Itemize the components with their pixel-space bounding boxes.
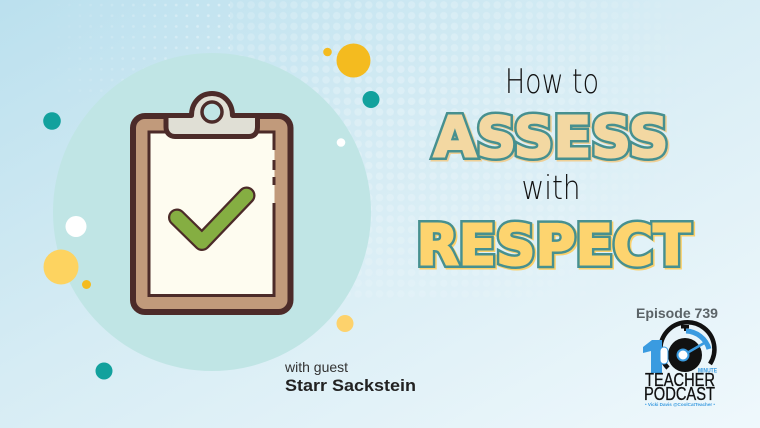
episode number: Episode 739 [636,305,718,321]
large teal circle [53,53,371,371]
numeral one and microphone [643,340,668,373]
clip ring hole [202,102,222,122]
headline: RESPECT: RESPECT [416,214,690,278]
paper sheet [149,132,274,296]
script line: with: with [522,168,580,207]
icon: clipboard with check mark [133,94,290,312]
script line: How to: How to [505,62,599,102]
clipboard board [133,116,290,312]
clip [166,94,258,136]
byline: • Vicki Davis @CoolCatTeacher • [645,402,715,407]
check mark [177,196,246,242]
headline: RESPECT: RESPECT [416,214,690,278]
PODCAST: PODCAST [644,384,715,404]
TEACHER: TEACHER [645,370,715,390]
headline: RESPECT: RESPECT [418,215,692,280]
stopwatch dial [660,322,714,372]
headline: ASSESS: ASSESS [434,106,668,170]
title [416,62,692,280]
decorative dots [43,44,379,380]
headline: ASSESS: ASSESS [434,106,668,170]
guest credit: Starr Sackstein [285,377,416,395]
guest credit [284,359,416,395]
logo: 10 Minute Teacher Podcast [643,322,717,407]
headline: ASSESS: ASSESS [435,107,670,172]
guest credit: with guest [284,359,348,375]
MINUTE label: MINUTE [698,368,717,374]
